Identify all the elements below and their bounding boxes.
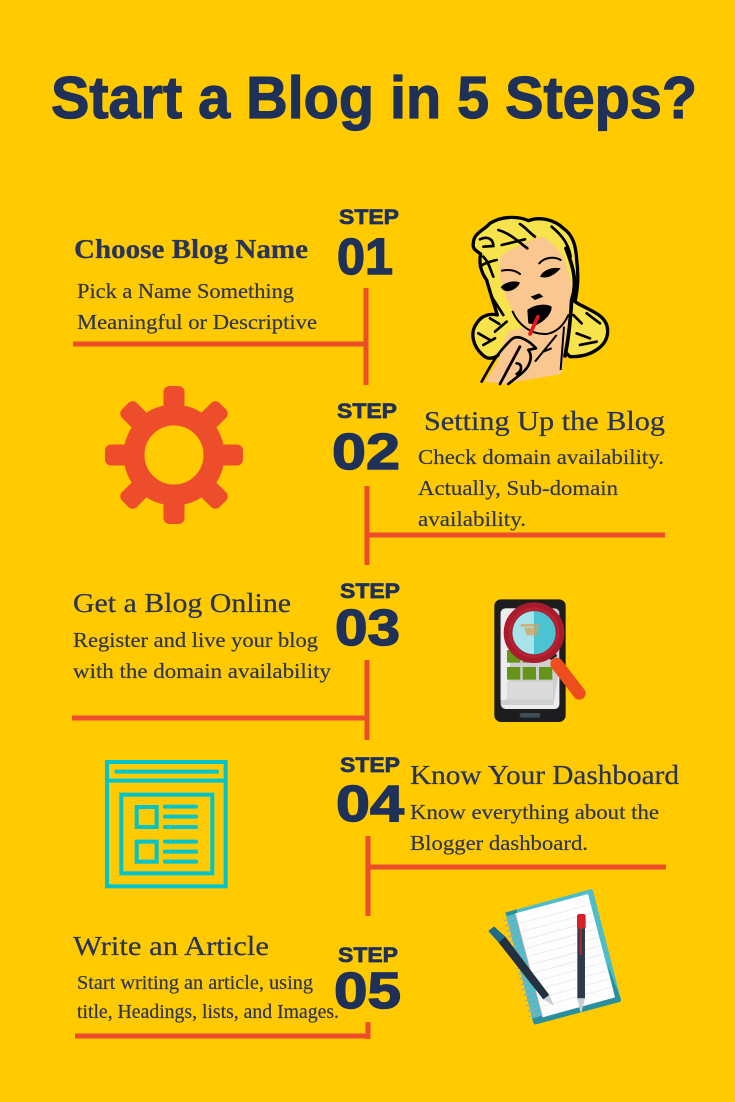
step 2 description: Actually, Sub-domain	[418, 476, 618, 500]
step 3	[72, 580, 400, 740]
blue pen	[488, 926, 554, 1006]
step 1 description	[77, 279, 317, 334]
neck shadow	[535, 327, 564, 370]
step 1 description: Pick a Name Something	[77, 279, 294, 303]
hair	[473, 217, 608, 358]
neck and chest	[485, 315, 568, 384]
step 1 badge: STEP	[339, 206, 399, 229]
step 2 badge	[332, 400, 400, 480]
step 3 badge: STEP	[340, 580, 400, 603]
notebook paper	[515, 894, 615, 1017]
step 5 description: title, Headings, lists, and Images.	[77, 1002, 339, 1023]
home button	[520, 713, 540, 718]
icon: website layout	[107, 762, 226, 886]
red pen	[577, 914, 586, 1012]
phone screen	[501, 608, 559, 709]
step 5	[73, 931, 401, 1039]
step 5 description: Start writing an article, using	[77, 973, 313, 994]
magnifier handle	[549, 654, 556, 658]
step 2 badge: 02	[332, 423, 400, 480]
step 2 description: availability.	[418, 507, 526, 531]
basket	[521, 624, 540, 635]
step 4 badge: 04	[336, 775, 405, 832]
step 3 heading: Get a Blog Online	[73, 588, 291, 618]
step 4 description: Know everything about the	[410, 800, 659, 824]
step 1 description: Meaningful or Descriptive	[77, 310, 317, 334]
step 4	[336, 754, 680, 916]
step 2	[332, 400, 665, 565]
step 4 description	[410, 800, 659, 855]
step 1 badge: 01	[337, 228, 393, 285]
step 3 description: Register and live your blog	[73, 628, 318, 652]
hair strokes	[478, 224, 600, 345]
screen tiles	[507, 650, 520, 663]
phone body	[494, 599, 566, 722]
step 4 badge	[336, 754, 405, 832]
step 5 heading: Write an Article	[73, 931, 269, 961]
face	[499, 237, 571, 333]
face lines	[502, 258, 568, 334]
notebook cover	[505, 889, 621, 1024]
step 2 description: Check domain availability.	[418, 445, 664, 469]
eyes, nose and mouth	[501, 268, 561, 325]
hand	[482, 337, 536, 384]
icon: thinking woman illustration	[473, 217, 608, 384]
spiral binding	[504, 918, 539, 1017]
step 3 description: with the domain availability	[73, 659, 331, 683]
step 5 badge: 05	[334, 962, 401, 1019]
icon: notebook and pens	[488, 889, 621, 1024]
step 1	[73, 206, 399, 385]
pen	[530, 317, 538, 334]
step 4 description: Blogger dashboard.	[410, 831, 588, 855]
step 4 badge: STEP	[340, 754, 400, 777]
step 3 connector	[72, 660, 367, 740]
step 5 description	[77, 973, 339, 1023]
icon: gear	[105, 386, 243, 524]
magnifier lens	[508, 607, 560, 659]
title: Start a Blog in 5 Steps?	[51, 65, 697, 131]
step 2 badge: STEP	[337, 400, 397, 423]
step 1 badge	[337, 206, 399, 285]
icon: phone with magnifying glass	[494, 599, 579, 722]
step 5 connector	[75, 1022, 368, 1039]
step 5 badge: STEP	[338, 944, 398, 967]
step 3 badge: 03	[335, 599, 400, 656]
hair shadow right	[565, 248, 574, 356]
step 2 heading: Setting Up the Blog	[424, 406, 665, 436]
step 2 description	[418, 445, 664, 531]
step 3 badge	[335, 580, 400, 656]
step 2 connector	[367, 486, 665, 565]
ruled lines	[519, 905, 611, 1007]
step 4 connector	[368, 836, 666, 916]
step 3 description	[73, 628, 331, 683]
step 1 heading: Choose Blog Name	[74, 234, 308, 264]
step 1 connector	[73, 288, 366, 385]
step 5 badge	[334, 944, 401, 1019]
step 4 heading: Know Your Dashboard	[410, 760, 680, 790]
